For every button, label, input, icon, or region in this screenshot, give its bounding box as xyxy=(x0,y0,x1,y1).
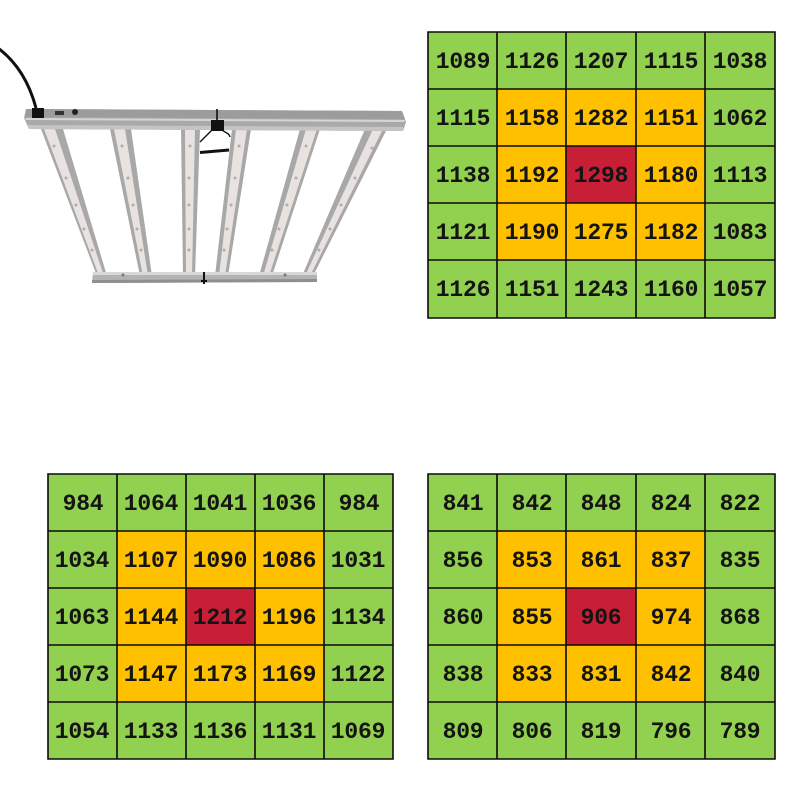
heat map: bottom right: 861 xyxy=(581,548,621,574)
heat map: bottom right: 840 xyxy=(720,662,760,688)
heat map: top right: 1089 xyxy=(436,49,490,75)
heat map: bottom left xyxy=(48,474,393,759)
heat map: bottom right: 831 xyxy=(581,662,621,688)
heat map: top right: 1115 xyxy=(436,106,490,132)
heat map: bottom left: 1212 xyxy=(193,605,247,631)
center connector and wires xyxy=(200,109,230,152)
heat map: bottom left: 1144 xyxy=(124,605,179,631)
heat map: bottom left: 1147 xyxy=(124,662,178,688)
heat map: bottom right: 841 xyxy=(443,491,483,517)
heat map: bottom right: 868 xyxy=(720,605,760,631)
heat map: bottom left: 1031 xyxy=(331,548,385,574)
heat map: bottom right: 809 xyxy=(443,719,483,745)
heat map: bottom left: 1086 xyxy=(262,548,316,574)
heat map: bottom right: 906 xyxy=(581,605,621,631)
heat map: top right: 1192 xyxy=(505,163,559,189)
light bar 4 xyxy=(215,129,251,276)
heat map: bottom left: 1136 xyxy=(193,719,247,745)
heat map: top right: 1298 xyxy=(574,163,628,189)
heat map: top right: 1126 xyxy=(436,277,490,303)
bottom clip xyxy=(201,272,207,284)
heat map: bottom right: 974 xyxy=(651,605,692,631)
heat map: bottom left: 1064 xyxy=(124,491,179,517)
heat map: bottom left: 1073 xyxy=(55,662,109,688)
heat map: bottom left: 1069 xyxy=(331,719,385,745)
heat map: top right: 1115 xyxy=(644,49,698,75)
heat map: top right: 1160 xyxy=(644,277,698,303)
heat map: top right: 1282 xyxy=(574,106,628,132)
heat map: bottom left: 1134 xyxy=(331,605,386,631)
heat map: top right: 1062 xyxy=(713,106,767,132)
heat map: top right: 1243 xyxy=(574,277,628,303)
light bar 6 xyxy=(302,129,387,276)
heat map: bottom right: 837 xyxy=(651,548,691,574)
bottom rail xyxy=(92,272,317,283)
heat map: top right: 1038 xyxy=(713,49,767,75)
heat map: bottom left: 1107 xyxy=(124,548,178,574)
heat map: top right: 1057 xyxy=(713,277,767,303)
heat map: top right: 1083 xyxy=(713,220,767,246)
heat map: top right: 1121 xyxy=(436,220,490,246)
light bar 1 xyxy=(41,129,107,276)
heat map: top right: 1158 xyxy=(505,106,559,132)
heat map: bottom left: 984 xyxy=(339,491,380,517)
heat map: bottom right: 855 xyxy=(512,605,552,631)
heat map: top right: 1113 xyxy=(713,163,767,189)
control ports xyxy=(55,109,78,115)
heat map: bottom right: 833 xyxy=(512,662,552,688)
heat map: top right: 1190 xyxy=(505,220,559,246)
heat map: bottom left: 1041 xyxy=(193,491,247,517)
heat map: bottom left: 1173 xyxy=(193,662,247,688)
heat map: bottom left: 1034 xyxy=(55,548,110,574)
heat map: bottom left: 1122 xyxy=(331,662,385,688)
heat map: top right: 1207 xyxy=(574,49,628,75)
heat map: bottom right: 822 xyxy=(720,491,760,517)
heat map: bottom right: 819 xyxy=(581,719,621,745)
light bar 3 xyxy=(181,129,200,276)
heat map: bottom left: 1196 xyxy=(262,605,316,631)
light bar 2 xyxy=(110,129,152,276)
product photo: LED grow light fixture xyxy=(0,48,406,284)
heat map: bottom right: 806 xyxy=(512,719,552,745)
heat map: bottom right: 856 xyxy=(443,548,483,574)
heat map: bottom left: 1036 xyxy=(262,491,316,517)
heat map: top right: 1182 xyxy=(644,220,698,246)
heat map: bottom right: 796 xyxy=(651,719,691,745)
heat map: bottom left: 1054 xyxy=(55,719,110,745)
heat map: bottom right: 848 xyxy=(581,491,621,517)
heat map: bottom right: 842 xyxy=(651,662,691,688)
heat map: top right: 1138 xyxy=(436,163,490,189)
heat map: bottom right: 853 xyxy=(512,548,552,574)
heat map: bottom right: 838 xyxy=(443,662,483,688)
heat map: top right: 1275 xyxy=(574,220,628,246)
heat map: bottom left: 1133 xyxy=(124,719,178,745)
heat map: top right: 1126 xyxy=(505,49,559,75)
power plug xyxy=(32,108,44,118)
heat map: bottom left: 1131 xyxy=(262,719,316,745)
top rail xyxy=(24,109,406,131)
light bar 5 xyxy=(259,129,320,276)
heat map: bottom right: 860 xyxy=(443,605,483,631)
heat map: top right: 1151 xyxy=(505,277,559,303)
heat map: bottom left: 984 xyxy=(63,491,104,517)
heat map: bottom right xyxy=(428,474,775,759)
heat map: bottom left: 1090 xyxy=(193,548,247,574)
heat map: bottom right: 824 xyxy=(651,491,692,517)
heat map: bottom right: 835 xyxy=(720,548,760,574)
heat map: bottom left: 1063 xyxy=(55,605,109,631)
heat map: bottom left: 1169 xyxy=(262,662,316,688)
heat map: bottom right: 842 xyxy=(512,491,552,517)
power cable xyxy=(0,48,36,108)
heat map: top right: 1180 xyxy=(644,163,698,189)
heat map: top right xyxy=(428,32,775,318)
heat map: bottom right: 789 xyxy=(720,719,760,745)
heat map: top right: 1151 xyxy=(644,106,698,132)
